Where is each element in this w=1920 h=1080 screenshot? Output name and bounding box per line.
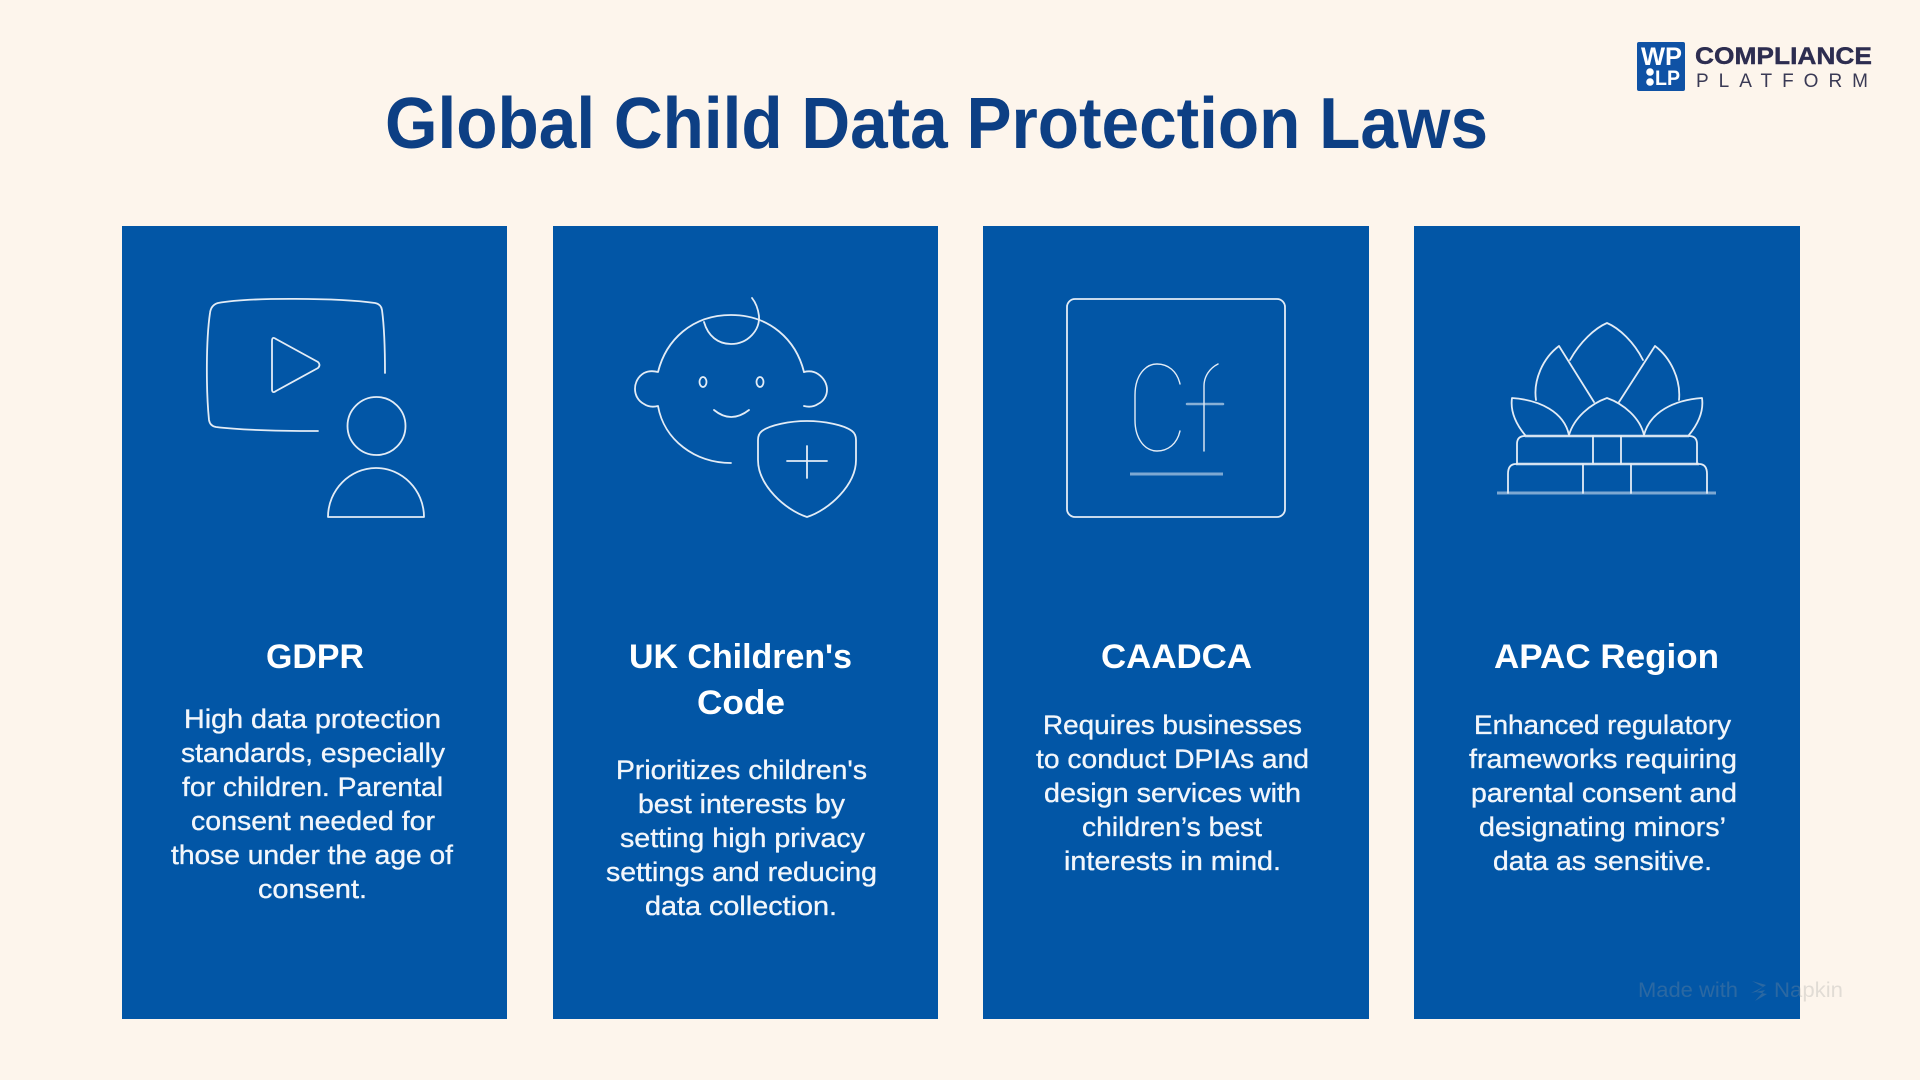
title: Global Child Data Protection Laws: [385, 84, 1488, 164]
text: UK Children's Code description: [606, 755, 877, 921]
text: GDPR description: [171, 704, 454, 904]
text: GDPR description: for children. Parental: [182, 772, 443, 802]
panel: UK Children's Code: [553, 226, 938, 1019]
text: APAC Region description: [1469, 710, 1737, 876]
heading: GDPR: GDPR: [266, 638, 364, 676]
text: UK Children's Code description: Prioritizes children's: [616, 755, 867, 785]
text: GDPR description: consent needed for: [191, 806, 435, 836]
logo: WP LP Compliance Platform: WP: [1641, 43, 1682, 71]
panel: CAADCA: [983, 226, 1369, 1019]
heading: UK Children's Code: [629, 638, 852, 722]
text: CAADCA description: children’s best: [1082, 812, 1263, 842]
text: UK Children's Code description: setting high privacy: [620, 823, 866, 853]
text: GDPR description: High data protection: [184, 704, 441, 734]
text: CAADCA description: interests in mind.: [1064, 846, 1281, 876]
icon: Cf document: [1067, 299, 1285, 517]
heading: CAADCA: CAADCA: [1101, 638, 1252, 676]
icon: baby face with shield: [635, 298, 856, 517]
logo: WP LP Compliance Platform: [1637, 42, 1872, 92]
text: CAADCA description: design services with: [1044, 778, 1301, 808]
text: GDPR description: standards, especially: [181, 738, 446, 768]
text: APAC Region description: parental consent and: [1471, 778, 1737, 808]
text: APAC Region description: Enhanced regulatory: [1474, 710, 1732, 740]
text: UK Children's Code description: best interests by: [638, 789, 846, 819]
watermark: Made with Napkin: Made with: [1638, 979, 1738, 1002]
heading: UK Children's Code: Code: [697, 684, 785, 722]
heading: UK Children's Code: UK Children's: [629, 638, 852, 676]
watermark: Made with Napkin: [1638, 979, 1843, 1002]
text: APAC Region description: designating minors’: [1479, 812, 1726, 842]
text: CAADCA description: to conduct DPIAs and: [1036, 744, 1309, 774]
text: APAC Region description: data as sensitive.: [1493, 846, 1712, 876]
panel: APAC Region: [1414, 226, 1800, 1019]
logo: WP LP Compliance Platform: PLATFORM: [1696, 71, 1868, 92]
watermark: Made with Napkin: Napkin: [1774, 979, 1843, 1002]
icon: lotus temple: [1497, 323, 1716, 493]
text: GDPR description: consent.: [258, 874, 367, 904]
logo: WP LP Compliance Platform: COMPLIANCE: [1695, 43, 1872, 70]
text: UK Children's Code description: data collection.: [645, 891, 837, 921]
text: APAC Region description: frameworks requiring: [1469, 744, 1737, 774]
text: UK Children's Code description: settings and reducing: [606, 857, 877, 887]
text: GDPR description: those under the age of: [171, 840, 454, 870]
text: CAADCA description: Requires businesses: [1043, 710, 1302, 740]
text: CAADCA description: [1036, 710, 1309, 876]
icon: video and person: [207, 299, 424, 517]
heading: APAC Region: APAC Region: [1494, 638, 1719, 676]
panel: GDPR: [122, 226, 507, 1019]
logo: WP LP Compliance Platform: LP: [1655, 67, 1680, 90]
